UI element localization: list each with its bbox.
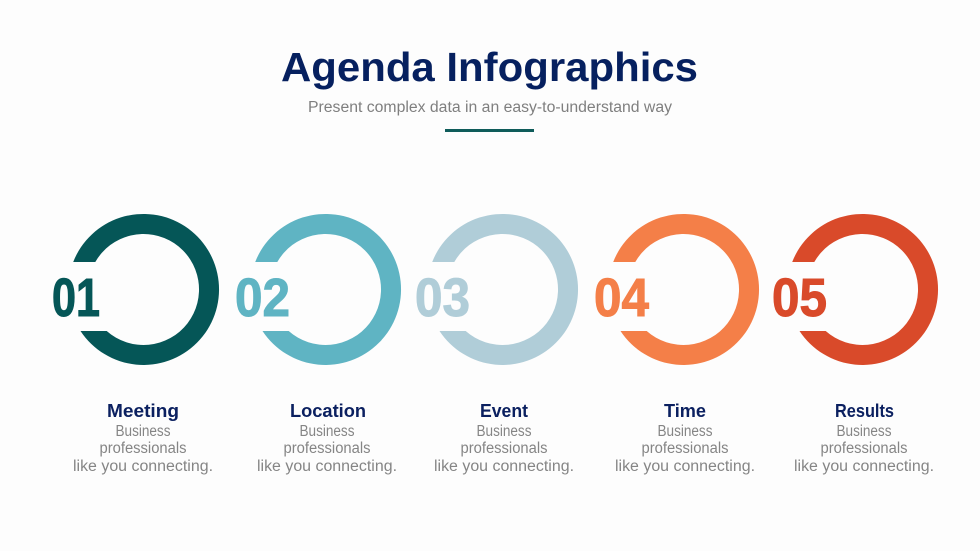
description 03: Business xyxy=(476,423,532,440)
step 04: Time xyxy=(594,214,759,475)
label: Event: Event xyxy=(480,401,528,421)
description 02: like you connecting. xyxy=(257,458,397,475)
description 04: like you connecting. xyxy=(615,458,755,475)
label: Time: Time xyxy=(664,401,706,421)
description 01: Business xyxy=(116,423,171,440)
number 04: 04 xyxy=(594,268,649,328)
number 05: 05 xyxy=(772,268,827,328)
number 01: 01 xyxy=(52,268,100,328)
description 03: like you connecting. xyxy=(434,458,574,475)
description 05: Business xyxy=(836,423,892,440)
description 04: Business xyxy=(658,423,713,440)
description 03: professionals xyxy=(460,440,548,457)
description 02: Business xyxy=(300,423,355,440)
label: Location: Location xyxy=(290,401,366,421)
ring 04 xyxy=(613,214,759,365)
description 01: like you connecting. xyxy=(73,458,213,475)
step 05: Results xyxy=(772,214,938,475)
description 01: professionals xyxy=(100,440,187,457)
subtitle: Present complex data in an easy-to-understand way xyxy=(308,99,672,116)
title: Agenda Infographics xyxy=(281,44,698,90)
ring 02 xyxy=(255,214,401,365)
label: Results: Results xyxy=(835,401,894,421)
step 01: Meeting xyxy=(52,214,219,475)
description 02: professionals xyxy=(284,440,371,457)
description 03 xyxy=(434,423,574,475)
description 04 xyxy=(615,423,755,475)
ring 01 xyxy=(73,214,219,365)
number 03: 03 xyxy=(415,268,470,328)
label: Meeting: Meeting xyxy=(107,401,179,421)
description 01 xyxy=(73,423,213,475)
description 04: professionals xyxy=(642,440,729,457)
title underline xyxy=(445,129,534,132)
description 02 xyxy=(257,423,397,475)
description 05: professionals xyxy=(820,440,908,457)
description 05 xyxy=(794,423,934,475)
ring 03 xyxy=(432,214,578,365)
step 02: Location xyxy=(235,214,401,475)
ring 05 xyxy=(792,214,938,365)
description 05: like you connecting. xyxy=(794,458,934,475)
number 02: 02 xyxy=(235,268,290,328)
step 03: Event xyxy=(415,214,578,475)
